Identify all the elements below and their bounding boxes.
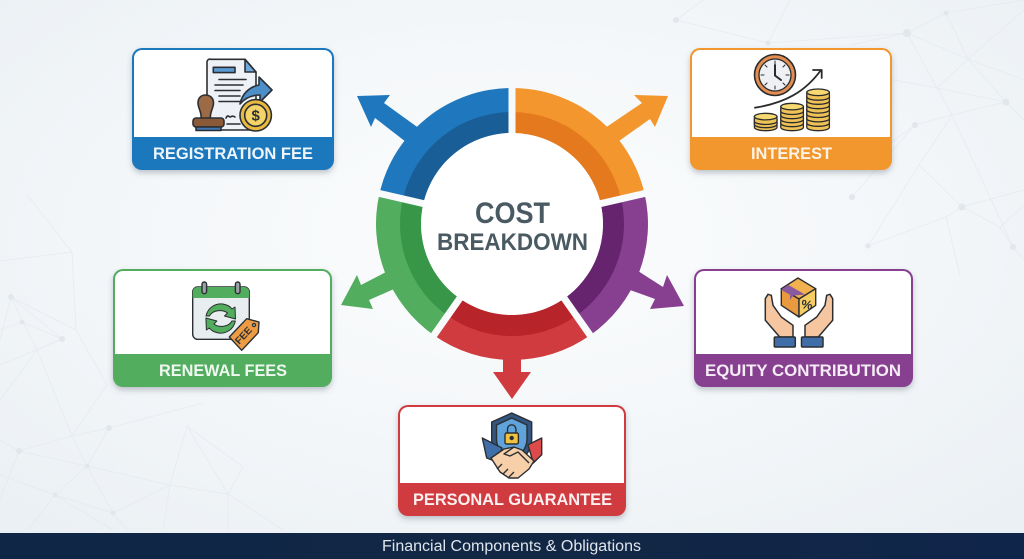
center title: COST	[475, 197, 550, 230]
arrow: to equity contribution	[630, 271, 684, 309]
label: EQUITY CONTRIBUTION	[705, 361, 901, 380]
footer bar	[0, 533, 1024, 559]
arrow: to renewal fees	[341, 272, 394, 309]
icon: growth arrow	[755, 70, 822, 108]
card frame	[398, 405, 626, 516]
segment: blue	[380, 88, 512, 204]
card: renewal fees	[113, 269, 332, 387]
icon: calendar with renew arrows	[193, 282, 259, 350]
arrow: to registration fee	[357, 95, 420, 142]
icon: document with stamp and coin	[193, 59, 272, 131]
segment: red	[434, 298, 590, 360]
card: interest	[690, 48, 892, 170]
segments	[376, 88, 648, 360]
segment: purple	[564, 193, 648, 335]
card frame	[690, 48, 892, 170]
icon: clock	[754, 54, 796, 96]
segment: green	[376, 193, 460, 335]
card: equity contribution	[694, 269, 913, 387]
card frame	[113, 269, 332, 387]
arrow: to interest	[605, 95, 668, 141]
icon: shield, lock and handshake	[482, 413, 542, 478]
card: personal guarantee	[398, 405, 626, 516]
card frame	[694, 269, 913, 387]
label: RENEWAL FEES	[159, 361, 287, 380]
icon glyph: fee tag: FEE	[233, 325, 255, 347]
icon: coin stacks	[754, 89, 829, 131]
center title: BREAKDOWN	[437, 229, 588, 256]
icon: box with percent	[781, 278, 816, 317]
label: PERSONAL GUARANTEE	[413, 490, 612, 509]
icon: open hands	[765, 294, 833, 347]
ring diagram	[341, 88, 684, 399]
card: registration fee	[132, 48, 334, 170]
arrow: to personal guarantee	[493, 352, 531, 399]
label: INTEREST	[751, 144, 833, 163]
icon glyph: dollar: $	[252, 108, 261, 124]
footer caption: Financial Components & Obligations	[382, 538, 641, 555]
segment: orange	[512, 88, 644, 204]
center circle	[421, 133, 603, 315]
label: REGISTRATION FEE	[153, 144, 313, 163]
card frame	[132, 48, 334, 170]
icon glyph: percent: %	[801, 297, 813, 313]
center title	[437, 197, 588, 256]
